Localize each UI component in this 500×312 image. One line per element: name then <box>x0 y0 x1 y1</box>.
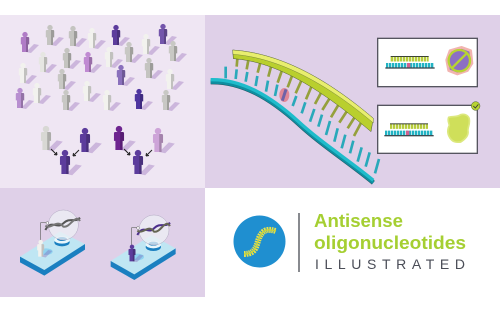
inset: functional protein <box>378 102 480 153</box>
test platform grey person <box>20 210 85 276</box>
panel: antisense strand binding <box>205 15 500 188</box>
target strand rungs <box>226 67 379 173</box>
title: ILLUSTRATED <box>315 256 465 272</box>
mismatch highlight <box>279 88 289 102</box>
check badge <box>471 102 480 110</box>
title: oligonucleotides <box>314 233 466 253</box>
title <box>314 211 466 272</box>
logo badge <box>234 216 286 268</box>
crowd of people <box>16 24 187 111</box>
title: Antisense <box>314 211 403 231</box>
target strand backbone <box>211 80 373 183</box>
inheritance group left <box>41 126 102 175</box>
antisense oligonucleotide bound to RNA strand <box>211 50 379 183</box>
inset: blocked protein <box>378 38 477 87</box>
mini duplex <box>385 56 435 69</box>
antisense strand backbone <box>233 50 373 132</box>
misfolded protein with prohibition sign <box>447 47 472 74</box>
test platform purple person <box>111 215 176 280</box>
antisense strand rungs <box>237 55 362 136</box>
functional protein <box>448 114 469 142</box>
divider line <box>298 213 300 272</box>
panel: population <box>0 15 205 188</box>
panel: genetic testing <box>0 188 205 297</box>
mini duplex <box>384 123 434 136</box>
inheritance group right <box>114 126 175 175</box>
